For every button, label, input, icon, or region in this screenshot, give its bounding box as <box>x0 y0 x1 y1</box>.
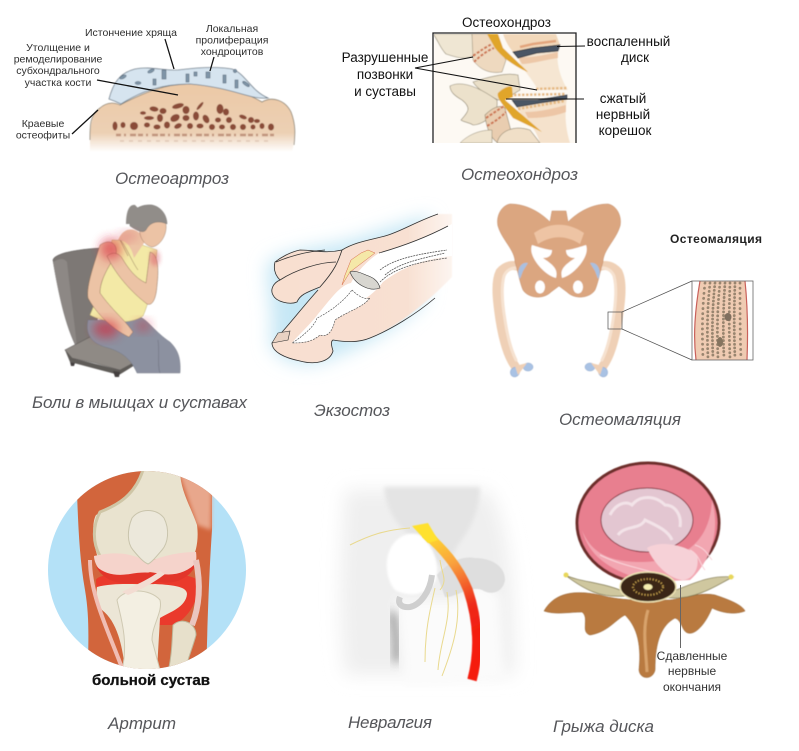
label: destroyed vertebrae: Разрушенные <box>342 50 428 65</box>
panel: neuralgia <box>340 487 515 732</box>
label: compressed nerve root: корешок <box>599 123 652 138</box>
knee label: больной сустав <box>92 673 210 689</box>
caption: Невралгия <box>348 713 432 732</box>
frame <box>433 33 576 143</box>
diagram title: Остеохондроз <box>462 15 551 30</box>
illustration: pelvis and bowed femurs <box>497 204 621 379</box>
label: marginal osteophytes: Краевые <box>22 118 64 130</box>
caption: Остеохондроз <box>461 165 578 184</box>
label: destroyed vertebrae: позвонки <box>357 67 413 82</box>
zoom box and lines <box>608 281 692 360</box>
illustration: finger with exostosis <box>268 214 452 364</box>
panel: exostosis <box>268 214 452 420</box>
caption: Экзостоз <box>314 401 390 420</box>
caption: Артрит <box>107 714 176 733</box>
leader lines <box>72 39 214 134</box>
panel: arthritis <box>48 471 246 732</box>
label: compressed nerve endings: Сдавленные <box>657 649 728 663</box>
panel: osteoarthrosis <box>14 23 295 188</box>
panel: muscle and joint pain <box>32 205 248 412</box>
label: subchondral thickening: Утолщение и <box>26 42 90 54</box>
label: local chondrocyte proliferation: хондроцитов <box>201 46 264 58</box>
panel: osteomalacia <box>497 204 762 429</box>
caption: Грыжа диска <box>553 717 654 736</box>
illustration: bone and cartilage <box>90 67 295 152</box>
label: subchondral thickening: субхондрального <box>16 65 100 77</box>
label: inflamed disc: диск <box>621 50 649 65</box>
label: compressed nerve endings: окончания <box>663 680 721 694</box>
panel: osteochondrosis <box>342 15 670 184</box>
label: local chondrocyte proliferation: Локальная <box>206 23 258 35</box>
label: local chondrocyte proliferation: пролиферация <box>196 34 268 46</box>
inset title: Остеомаляция <box>670 232 762 246</box>
label: marginal osteophytes: остеофиты <box>16 130 70 142</box>
label: destroyed vertebrae: и суставы <box>354 84 416 99</box>
panel: disc herniation <box>544 463 745 736</box>
illustration: herniated disc and vertebra <box>544 463 745 678</box>
label: subchondral thickening: участка кости <box>25 77 91 89</box>
label: compressed nerve root: нервный <box>596 107 650 122</box>
illustration: seated woman <box>53 205 180 377</box>
leader line <box>680 585 682 648</box>
illustration: hip with sciatic nerve <box>340 487 515 685</box>
inset: porous bone section <box>692 281 753 360</box>
label: inflamed disc: воспаленный <box>587 34 670 49</box>
label: cartilage thinning: Истончение хряща <box>85 27 177 39</box>
label: subchondral thickening: ремоделирование <box>14 54 102 66</box>
leader lines <box>415 46 585 99</box>
caption: Остеоартроз <box>115 169 229 188</box>
illustration: knee joint in circle <box>48 471 246 669</box>
caption: Остеомаляция <box>559 410 681 429</box>
label: compressed nerve endings: нервные <box>668 664 716 678</box>
illustration: spine segment <box>433 34 576 144</box>
label: compressed nerve root: сжатый <box>600 91 646 106</box>
caption: Боли в мышцах и суставах <box>32 393 248 412</box>
